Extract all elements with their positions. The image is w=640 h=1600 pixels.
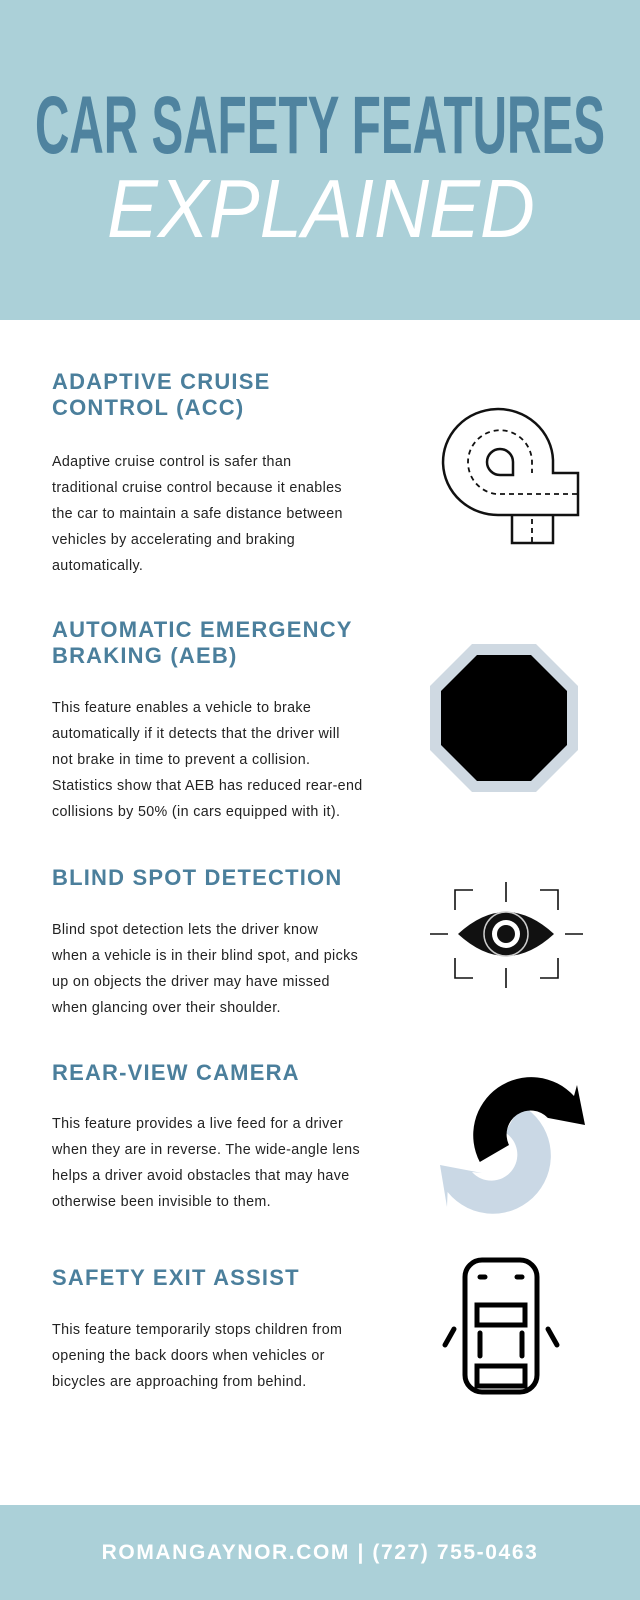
- text: rear camera: This feature provides a live feed for a driver: [52, 1116, 343, 1132]
- footer: [0, 1505, 640, 1600]
- text: blind spot: [52, 922, 358, 1016]
- text: rear camera: helps a driver avoid obstacles that may have: [52, 1168, 350, 1184]
- section: rear camera: [52, 1060, 585, 1214]
- heading: ACC: CONTROL (ACC): [52, 395, 244, 420]
- text: ACC: [52, 454, 343, 574]
- text: safety exit: [52, 1322, 342, 1390]
- section: safety exit: [52, 1258, 560, 1394]
- icon: road loop: [442, 408, 580, 544]
- icon: car top view: [442, 1258, 560, 1394]
- heading: AEB: BRAKING (AEB): [52, 643, 237, 668]
- text: AEB: This feature enables a vehicle to brake: [52, 700, 311, 716]
- icon: eye: [430, 882, 583, 988]
- text: safety exit: bicycles are approaching from behind.: [52, 1374, 307, 1390]
- text: rear camera: when they are in reverse. The wide-angle lens: [52, 1142, 360, 1158]
- text: safety exit: This feature temporarily stops children from: [52, 1322, 342, 1338]
- text: ACC: the car to maintain a safe distance between: [52, 506, 343, 522]
- text: AEB: collisions by 50% (in cars equipped with it).: [52, 804, 340, 820]
- text: ACC: traditional cruise control because it enables: [52, 480, 342, 496]
- text: AEB: Statistics show that AEB has reduced rear-end: [52, 778, 363, 794]
- icon: stop octagon: [430, 644, 578, 792]
- heading: blind spot: BLIND SPOT DETECTION: [52, 865, 342, 890]
- text: blind spot: up on objects the driver may have missed: [52, 974, 330, 990]
- text: ACC: vehicles by accelerating and braking: [52, 532, 295, 548]
- text: AEB: [52, 700, 363, 820]
- text: AEB: not brake in time to prevent a collision.: [52, 752, 310, 768]
- section: ACC: [52, 369, 580, 574]
- heading: ACC: ADAPTIVE CRUISE: [52, 369, 270, 394]
- text: blind spot: when glancing over their shoulder.: [52, 1000, 281, 1016]
- heading: rear camera: REAR-VIEW CAMERA: [52, 1060, 300, 1085]
- text: blind spot: Blind spot detection lets the driver know: [52, 922, 318, 938]
- heading: safety exit: SAFETY EXIT ASSIST: [52, 1265, 300, 1290]
- text: rear camera: otherwise been invisible to them.: [52, 1194, 271, 1210]
- heading: AEB: AUTOMATIC EMERGENCY: [52, 617, 353, 642]
- heading: ACC: [52, 369, 270, 420]
- heading: AEB: [52, 617, 353, 668]
- text: ACC: Adaptive cruise control is safer than: [52, 454, 291, 470]
- text: blind spot: when a vehicle is in their blind spot, and picks: [52, 948, 358, 964]
- text: AEB: automatically if it detects that the driver will: [52, 726, 340, 742]
- subtitle: EXPLAINED: [107, 162, 535, 255]
- section: AEB: [52, 617, 578, 820]
- text: rear camera: [52, 1116, 360, 1210]
- text: ACC: automatically.: [52, 558, 143, 574]
- header banner: [0, 0, 640, 320]
- section: blind spot: [52, 865, 583, 1016]
- text: safety exit: opening the back doors when vehicles or: [52, 1348, 325, 1364]
- footer: ROMANGAYNOR.COM | (727) 755-0463: [102, 1541, 538, 1564]
- icon: rotating arrows: [440, 1077, 585, 1214]
